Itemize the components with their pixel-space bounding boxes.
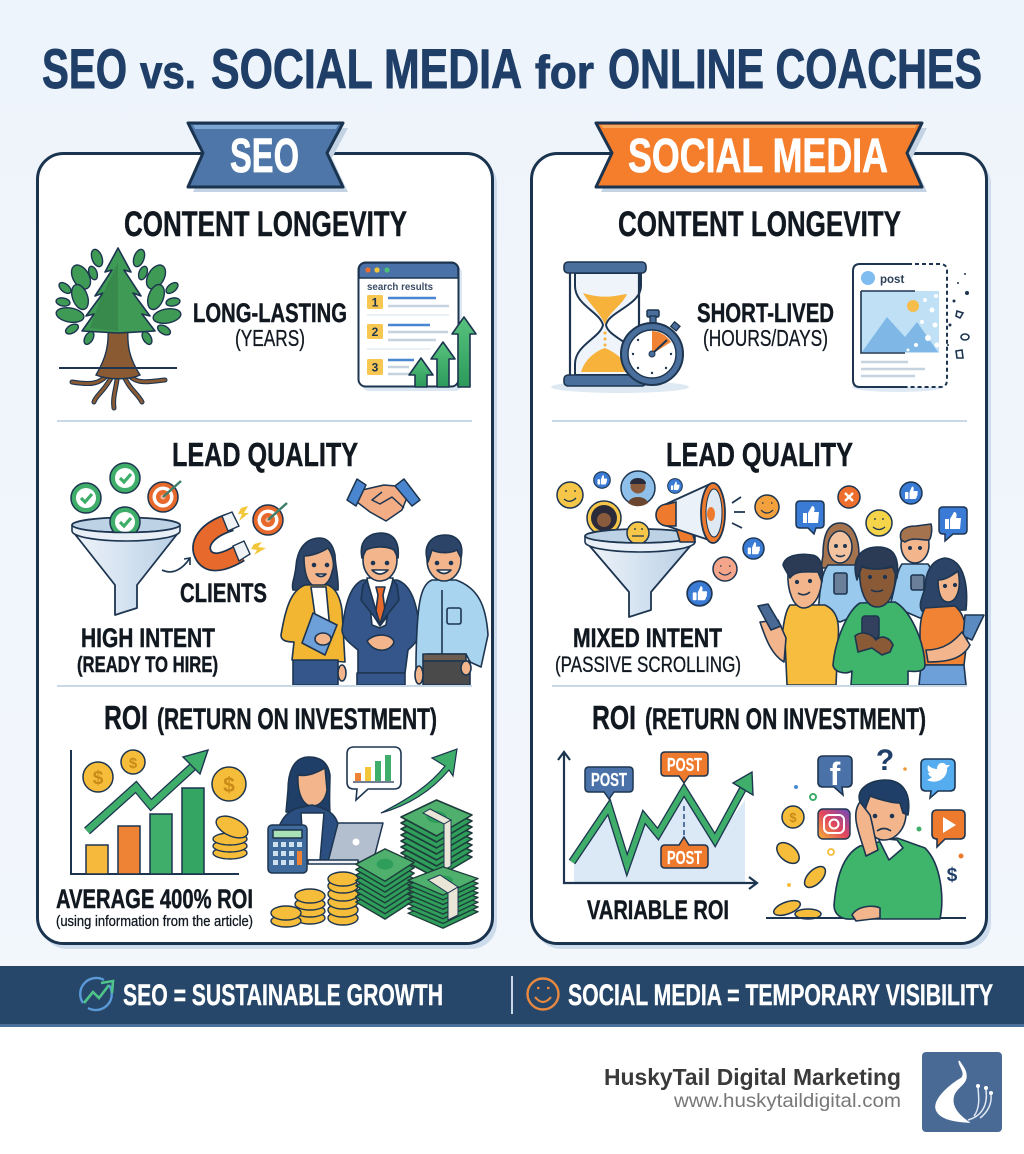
banner icon: growth — [80, 978, 113, 1010]
text: average ROI: AVERAGE 400% ROI — [56, 884, 253, 914]
icons: floating reactions — [796, 482, 967, 541]
heading: content longevity: CONTENT LONGEVITY — [124, 205, 407, 244]
title: SEO — [42, 37, 127, 100]
text: short-lived: SHORT-LIVED — [697, 298, 834, 328]
icon: magnet and target — [202, 503, 287, 562]
text: short-lived: (HOURS/DAYS) — [703, 325, 828, 351]
text: high intent — [77, 623, 218, 677]
chart: growth bars: $ — [129, 755, 138, 772]
divider — [57, 685, 472, 687]
woman in orange shirt — [919, 558, 984, 685]
text: clients: CLIENTS — [180, 578, 267, 608]
icons: falling coins: $ — [947, 865, 958, 886]
people: crowd on phones — [758, 523, 984, 685]
icons: falling coins: $ — [789, 810, 797, 825]
icon: hourglass and stopwatch — [551, 262, 689, 393]
title: vs. — [140, 46, 196, 98]
woman at back — [818, 523, 868, 622]
text: mixed intent: (PASSIVE SCROLLING) — [555, 652, 741, 677]
callout: post orange bottom — [661, 837, 708, 868]
heading: ROI: ROI — [104, 699, 148, 736]
SEO ribbon — [188, 123, 348, 192]
man at back — [890, 524, 933, 618]
arrow: growth swoosh — [381, 749, 457, 813]
callout: post orange top — [661, 752, 708, 783]
icons: social networks: ? — [876, 744, 894, 777]
icon: search results window — [358, 262, 476, 391]
callout: post orange bottom: POST — [667, 848, 702, 868]
heading: ROI: ROI — [592, 699, 636, 736]
banner icon: smile — [528, 978, 558, 1010]
SEO ribbon: SEO — [230, 130, 299, 183]
heading: ROI — [592, 699, 926, 736]
panel: social media — [532, 123, 991, 949]
divider — [552, 420, 967, 422]
chart: growth bars: $ — [93, 768, 104, 789]
icon: funnel with checks — [71, 463, 190, 615]
text: average ROI: (using information from the article) — [56, 913, 253, 930]
icons: social networks — [818, 744, 965, 847]
heading: lead quality: LEAD QUALITY — [172, 436, 358, 473]
chart: growth bars: $ — [223, 774, 235, 797]
heading: ROI — [104, 699, 437, 736]
brand text — [604, 1064, 901, 1112]
speech bubble: mini chart — [347, 747, 401, 800]
text: long-lasting: (YEARS) — [235, 325, 305, 351]
chart: variable ROI line — [558, 752, 757, 889]
panel: SEO — [38, 123, 497, 949]
text: short-lived — [697, 298, 834, 351]
text: mixed intent — [555, 623, 741, 677]
people: business team — [281, 533, 488, 685]
text: high intent: (READY TO HIRE) — [77, 652, 218, 677]
icon: search results window: search results — [367, 281, 433, 293]
woman in yellow jacket — [281, 538, 346, 685]
icon: cash stacks — [356, 800, 478, 928]
social media ribbon: SOCIAL MEDIA — [628, 130, 888, 183]
icon: woman with calculator and laptop — [268, 757, 383, 873]
banner — [0, 966, 1024, 1027]
social media ribbon — [596, 123, 927, 192]
heading: ROI: (RETURN ON INVESTMENT) — [157, 703, 437, 736]
man in blue suit — [342, 533, 420, 685]
text: variable ROI: VARIABLE ROI — [587, 895, 729, 925]
icon: disintegrating post — [852, 264, 969, 392]
callout: post blue — [585, 767, 633, 799]
icon: disintegrating post: post — [880, 274, 904, 286]
text: long-lasting — [193, 298, 347, 351]
logo — [922, 1052, 1002, 1132]
brand text: www.huskytaildigital.com — [673, 1090, 901, 1112]
text: high intent: HIGH INTENT — [81, 623, 215, 653]
chart: growth bars — [71, 750, 251, 874]
icon: search results window: 2 — [372, 325, 379, 339]
icon: funnel, megaphone and reactions — [557, 471, 779, 617]
footer area — [0, 1027, 1024, 1154]
title — [42, 37, 982, 100]
icon: coin stacks — [271, 872, 358, 927]
callout: post blue: POST — [591, 770, 627, 790]
title: for — [535, 46, 594, 98]
text: mixed intent: MIXED INTENT — [573, 623, 722, 653]
person: worried man — [766, 780, 966, 921]
man in green shirt — [833, 547, 925, 685]
brand text: HuskyTail Digital Marketing — [604, 1064, 901, 1090]
divider — [552, 685, 967, 687]
icon: search results window: 3 — [372, 360, 379, 374]
icons: social networks: f — [830, 756, 841, 792]
text: average ROI — [56, 884, 253, 930]
man in light blue shirt — [415, 535, 488, 685]
icon: tree with roots — [55, 248, 182, 408]
icon: search results window: 1 — [372, 296, 379, 310]
title: SOCIAL MEDIA — [211, 37, 522, 100]
man in yellow shirt — [758, 554, 838, 685]
text: long-lasting: LONG-LASTING — [193, 298, 347, 328]
heading: lead quality: LEAD QUALITY — [666, 436, 853, 473]
heading: content longevity: CONTENT LONGEVITY — [618, 205, 901, 244]
banner text: SEO: SEO = SUSTAINABLE GROWTH — [123, 979, 443, 1012]
divider — [57, 420, 472, 422]
callout: post orange top: POST — [667, 755, 702, 775]
icon: handshake — [347, 479, 420, 521]
icons: falling coins — [772, 767, 964, 919]
